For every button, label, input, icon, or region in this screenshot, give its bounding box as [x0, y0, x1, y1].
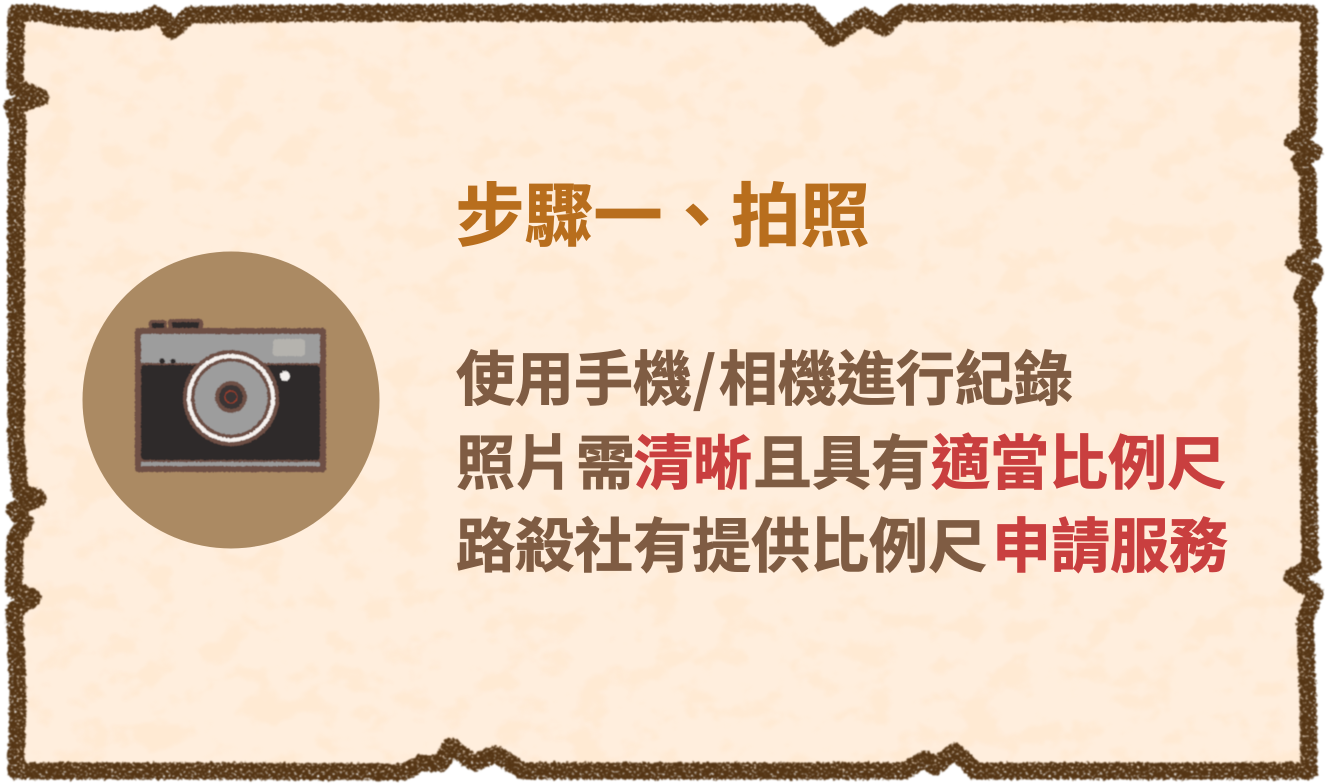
camera [135, 319, 326, 472]
line 2: 且具有 [753, 416, 930, 501]
line 3: 路殺社有提供比例尺 [456, 499, 987, 584]
line 3 [456, 499, 1228, 584]
text block: instructions [456, 332, 1228, 584]
line 2: 需 [576, 416, 635, 501]
heading: 步驟一、拍照 [456, 160, 870, 260]
line 2: 適當比例尺 [931, 416, 1226, 501]
line 3: 申請服務 [992, 499, 1228, 584]
icon: camera in circle [82, 252, 380, 548]
line 2 [456, 416, 1226, 501]
line 1: 使用手機/相機進行紀錄 [456, 332, 1073, 417]
line 2: 清晰 [634, 416, 752, 501]
line 2: 照片 [456, 416, 574, 501]
icon background circle [82, 252, 380, 548]
